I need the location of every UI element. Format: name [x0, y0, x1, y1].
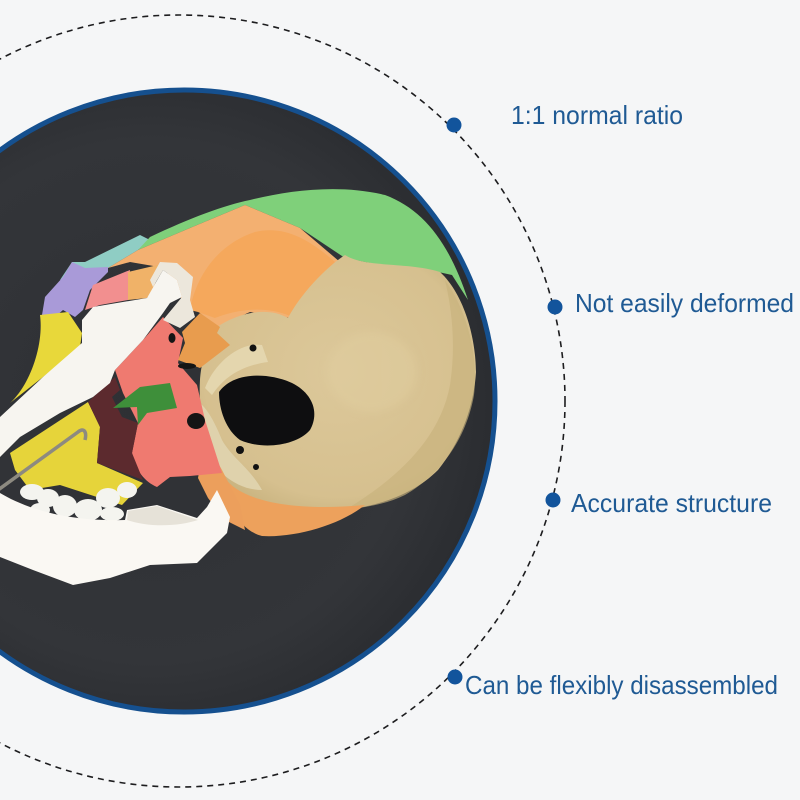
green inner bone	[113, 383, 177, 425]
dashed orbit circle	[0, 15, 565, 787]
skull model	[0, 189, 476, 585]
pink bone	[85, 270, 130, 310]
orange frontal bone	[108, 205, 340, 327]
green parietal bone	[138, 189, 468, 300]
yellow maxilla	[10, 402, 143, 505]
lower jaw mandible	[0, 490, 230, 585]
dot marker 3	[546, 492, 560, 508]
tan-orange temple	[128, 265, 158, 300]
red-pink sphenoid bone	[115, 317, 222, 487]
foramen holes	[168, 333, 205, 429]
dark photo background	[0, 90, 495, 712]
dot marker 4	[448, 670, 462, 684]
pale condyle upper	[205, 345, 268, 395]
teeth row	[20, 482, 137, 521]
cranium blue-green strip	[60, 235, 150, 280]
maroon bone	[88, 377, 143, 480]
label: Not easily deformed: Not easily deformed	[575, 288, 794, 318]
label: 1:1 normal ratio: 1:1 normal ratio	[511, 100, 683, 130]
orange sphenoid chunk	[178, 313, 230, 368]
lower orange bone	[225, 478, 365, 536]
foramen magnum	[219, 376, 314, 445]
bright orange ridge	[190, 230, 335, 318]
label: Can be flexibly disassembled: Can be flexibly disassembled	[465, 670, 778, 700]
purple bone	[42, 262, 108, 317]
label: Accurate structure: Accurate structure	[571, 488, 772, 518]
blue ring	[0, 90, 495, 712]
foramen dots	[236, 344, 259, 470]
orange wedge lower	[198, 466, 245, 530]
pale basilar	[202, 404, 262, 490]
white cheek bone	[0, 270, 182, 457]
tan occipital bone	[200, 255, 476, 513]
metal hook	[0, 430, 86, 490]
cheek hoop	[150, 262, 195, 328]
photo: skull model in blue ring	[0, 90, 495, 712]
dot marker 2	[548, 300, 562, 314]
tan surface bump	[327, 332, 417, 412]
jaw shadow	[127, 506, 198, 525]
dot marker 1	[446, 118, 462, 132]
tan shading right	[345, 280, 475, 510]
yellow bone upper	[10, 312, 82, 403]
